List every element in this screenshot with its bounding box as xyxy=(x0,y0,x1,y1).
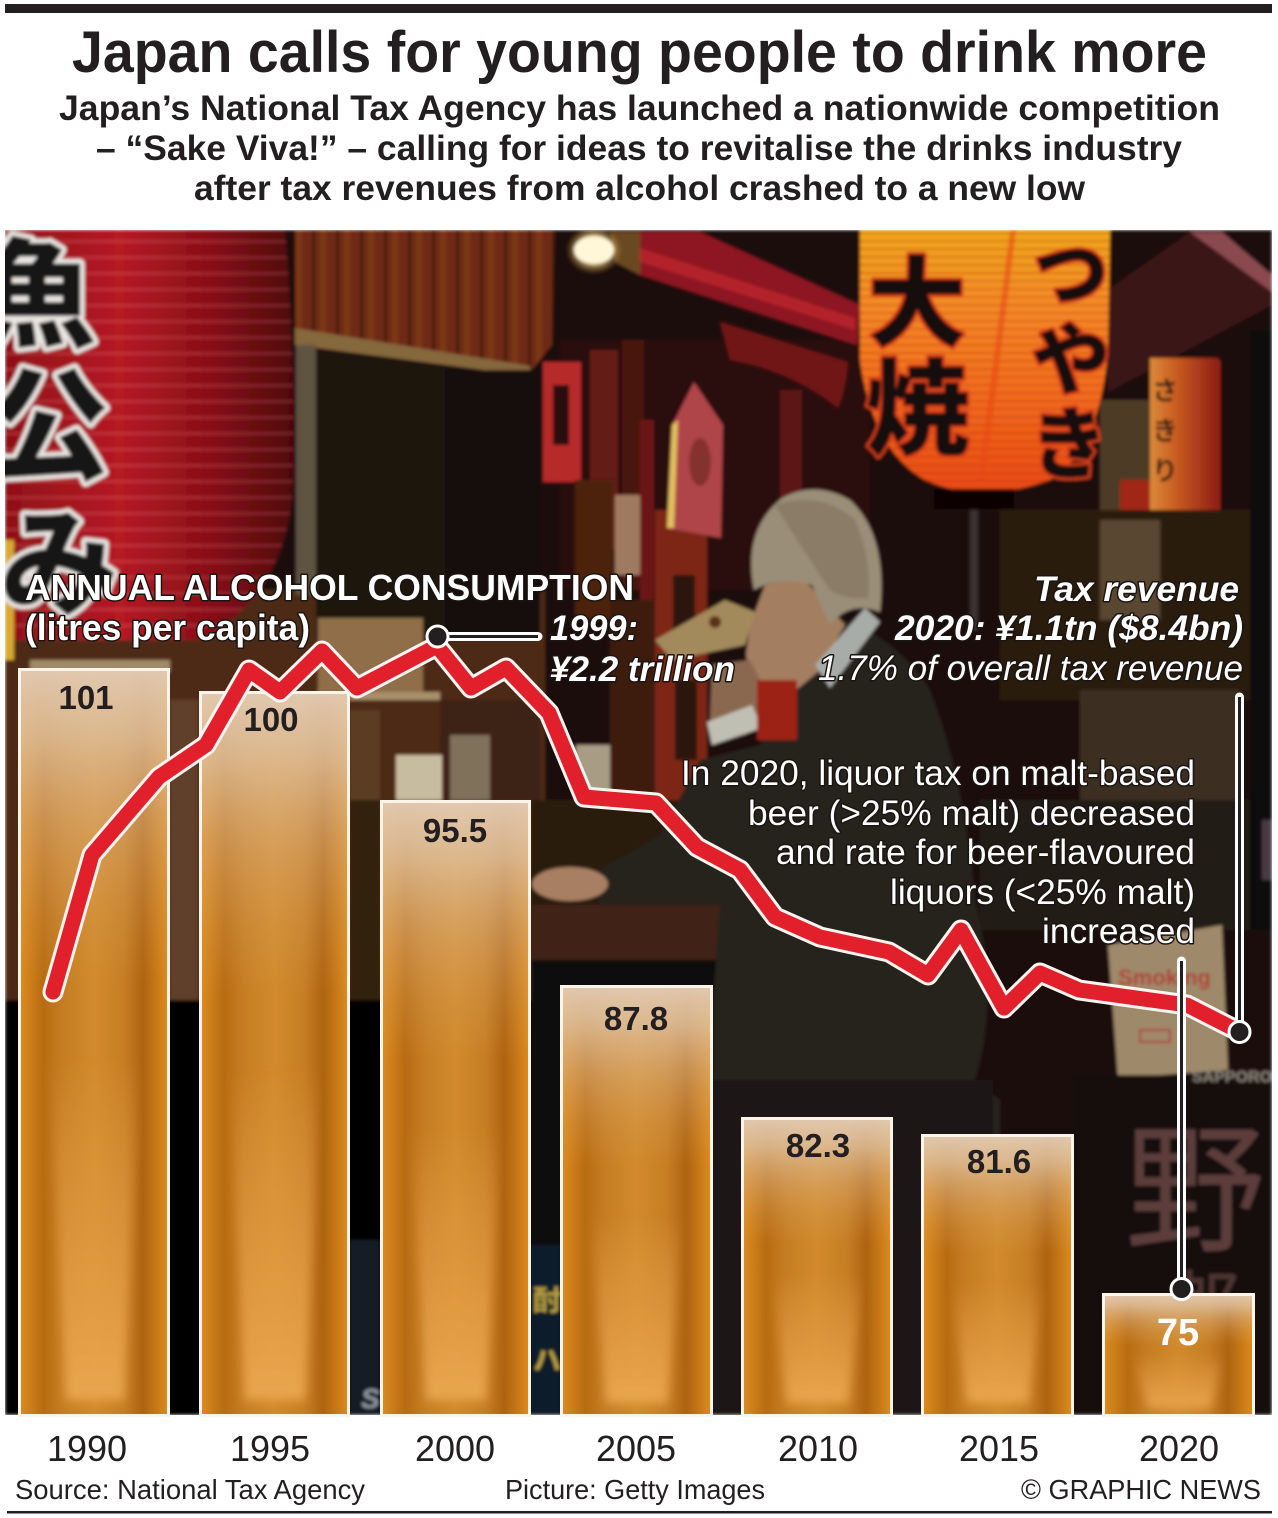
bar 2015 xyxy=(922,1136,1072,1416)
callout: 2020 tax revenue: 2020: ¥1.1tn ($8.4bn) xyxy=(894,609,1243,648)
background photo: izakaya bar scene: み xyxy=(0,469,118,640)
callout: 2020 liquor tax note xyxy=(681,753,1195,951)
callout: 2020 tax revenue: Tax revenue xyxy=(1034,570,1239,609)
bar 2000: 95.5 xyxy=(423,812,487,849)
year axis labels: 1995 xyxy=(230,1428,310,1469)
bar 2020: 75 xyxy=(1157,1312,1199,1354)
callout: 2020 liquor tax note: and rate for beer-flavoured xyxy=(776,832,1195,872)
year axis labels: 2020 xyxy=(1139,1428,1219,1469)
background photo: izakaya bar scene: Smoking xyxy=(1118,965,1211,990)
subtitle xyxy=(59,88,1220,208)
bar 1990 xyxy=(20,670,168,1416)
beer glass xyxy=(655,600,755,660)
callout leader: malt tax note to 2020 bar xyxy=(1171,961,1192,1300)
background photo: izakaya bar scene: さ xyxy=(1152,376,1178,406)
man: hair xyxy=(751,489,881,625)
shelf and box xyxy=(318,618,423,693)
bottom rule xyxy=(7,1511,1272,1514)
right background xyxy=(1000,510,1272,700)
man: cuff xyxy=(707,705,762,745)
dark red wall behind the signs xyxy=(560,340,870,590)
background photo: izakaya bar scene: SAPPORO xyxy=(1192,1069,1272,1086)
background photo: izakaya bar scene: S xyxy=(361,1383,380,1414)
chart heading: annual alcohol consumption: ANNUAL ALCOHOL CONSUMPTION xyxy=(25,567,634,608)
background photo: izakaya bar scene: つ xyxy=(1034,215,1108,322)
title: Japan calls for young people to drink more xyxy=(72,20,1207,85)
red awning xyxy=(640,232,860,345)
man: collar xyxy=(815,608,880,688)
callout: 2020 liquor tax note: liquors (<25% malt) xyxy=(890,872,1195,912)
year axis labels: 1990 xyxy=(47,1428,127,1469)
hanging small lantern xyxy=(1096,398,1150,512)
callout: 2020 liquor tax note: In 2020, liquor tax on malt-based xyxy=(681,753,1195,793)
chart heading: annual alcohol consumption xyxy=(25,567,634,648)
counter xyxy=(531,799,676,906)
warm brown back area on the left xyxy=(5,590,545,1010)
bar 2000 xyxy=(382,802,530,1416)
background photo: izakaya bar scene: 郎 xyxy=(1168,1266,1240,1346)
year axis labels xyxy=(47,1428,1219,1469)
picture credit: Picture: Getty Images xyxy=(505,1474,765,1505)
callout: 2020 tax revenue: 1.7% of overall tax revenue xyxy=(818,649,1243,688)
background photo: izakaya bar scene: 酎 xyxy=(533,1285,561,1316)
year axis labels: 2005 xyxy=(596,1428,676,1469)
man: suit xyxy=(596,617,1002,1134)
copyright credit: © GRAPHIC NEWS xyxy=(1021,1474,1261,1505)
background photo: izakaya bar scene: 野 xyxy=(1125,1113,1265,1270)
bar 2010 xyxy=(742,1118,892,1416)
callout: 1999 tax revenue: 1999: xyxy=(550,609,638,648)
smoking sign xyxy=(1108,925,1228,1078)
source credit: Source: National Tax Agency xyxy=(15,1474,365,1505)
bar 2005: 87.8 xyxy=(604,1000,668,1037)
subtitle: Japan’s National Tax Agency has launched a nationwide competition xyxy=(59,88,1220,128)
orange lantern xyxy=(860,230,1110,492)
chart heading: annual alcohol consumption: (litres per capita) xyxy=(25,607,310,648)
dark board with brush lettering xyxy=(1114,1073,1262,1291)
man: face xyxy=(746,575,845,695)
background photo: izakaya bar scene: き xyxy=(1152,416,1178,446)
bar 2005 xyxy=(562,986,712,1416)
bar 1995 xyxy=(200,692,348,1416)
top rule xyxy=(5,4,1272,13)
bar 1990: 101 xyxy=(58,679,114,716)
bar 2020 xyxy=(1104,1294,1254,1416)
background photo: izakaya bar scene: 焼 xyxy=(866,325,970,476)
subtitle: – “Sake Viva!” – calling for ideas to revitalise the drinks industry xyxy=(96,128,1182,168)
background photo: izakaya bar scene: 大 xyxy=(868,225,966,367)
right dark flag xyxy=(1108,232,1272,392)
callout leader: 2020 tax revenue xyxy=(1229,697,1250,1042)
line chart: tax revenue xyxy=(53,646,1240,1032)
wooden tag xyxy=(667,382,723,538)
callout leader: 1999 peak xyxy=(427,626,538,647)
callout: 1999 tax revenue xyxy=(550,609,735,689)
callout: 2020 liquor tax note: beer (>25% malt) decreased xyxy=(748,793,1195,833)
big red lantern xyxy=(5,230,294,640)
callout: 2020 liquor tax note: increased xyxy=(1042,911,1195,951)
red signs and poles xyxy=(543,362,581,482)
bar 1995: 100 xyxy=(243,701,299,738)
background photo: izakaya bar scene: ハ xyxy=(533,1345,561,1376)
roof xyxy=(295,230,555,372)
lamp glow xyxy=(566,226,622,274)
bar 2010: 82.3 xyxy=(786,1127,850,1164)
subtitle: after tax revenues from alcohol crashed to a new low xyxy=(194,168,1085,208)
bar 2015: 81.6 xyxy=(967,1143,1031,1180)
background photo: izakaya bar scene: り xyxy=(1152,456,1178,486)
year axis labels: 2010 xyxy=(778,1428,858,1469)
dark doorway xyxy=(315,352,454,640)
bar chart: annual alcohol consumption xyxy=(20,670,1254,1416)
chopstick packs xyxy=(396,755,442,800)
year axis labels: 2015 xyxy=(959,1428,1039,1469)
year axis labels: 2000 xyxy=(415,1428,495,1469)
background photo: izakaya bar scene: き xyxy=(1030,383,1108,495)
background photo: izakaya bar scene xyxy=(0,201,1272,1415)
callout: 2020 tax revenue xyxy=(818,570,1243,688)
man: hand on counter xyxy=(532,867,608,901)
background photo: izakaya bar scene: や xyxy=(1032,299,1110,411)
callout: 1999 tax revenue: ¥2.2 trillion xyxy=(550,650,735,689)
